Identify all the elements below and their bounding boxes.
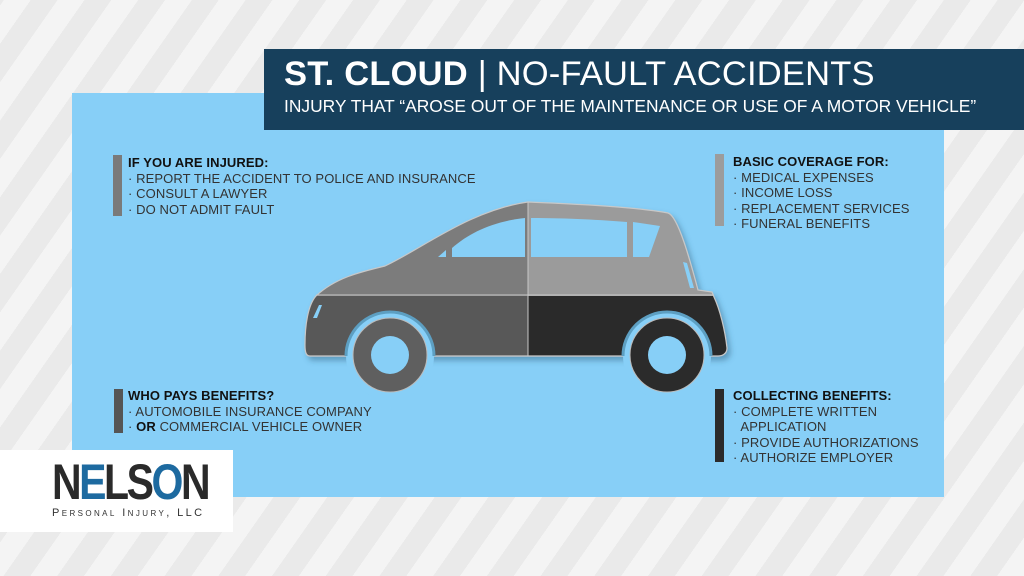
text block: if you are injured: IF YOU ARE INJURED: [128, 155, 269, 170]
logo [0, 450, 233, 532]
text block: collecting benefits: · AUTHORIZE EMPLOYER [733, 450, 893, 465]
text block: who pays [114, 388, 372, 434]
text block: basic coverage [715, 154, 910, 231]
text block: if you are injured: · REPORT THE ACCIDENT TO POLICE AND INSURANCE [128, 170, 476, 186]
logo tagline: Personal Injury, LLC [52, 507, 204, 519]
text block: collecting benefits: · PROVIDE AUTHORIZATIONS [733, 434, 919, 450]
text block: who pays: WHO PAYS BENEFITS? [128, 388, 274, 403]
wheels [346, 312, 711, 400]
text block: basic coverage: · INCOME LOSS [733, 185, 833, 200]
text block: basic coverage: · MEDICAL EXPENSES [733, 170, 874, 184]
text block: basic coverage: BASIC COVERAGE FOR: [733, 154, 889, 169]
text block: who pays: · OR COMMERCIAL VEHICLE OWNER [128, 419, 362, 434]
text block: if you are injured [113, 155, 476, 216]
text block: if you are injured: · DO NOT ADMIT FAULT [128, 202, 274, 216]
subtitle: INJURY THAT “AROSE OUT OF THE MAINTENANCE OR USE OF A MOTOR VEHICLE” [284, 96, 976, 116]
text block: basic coverage: · REPLACEMENT SERVICES [733, 200, 910, 216]
text block: if you are injured: · CONSULT A LAWYER [128, 186, 268, 201]
text block: basic coverage: · FUNERAL BENEFITS [733, 216, 870, 231]
windows [452, 218, 525, 257]
header banner [264, 49, 1024, 130]
text block: who pays: · AUTOMOBILE INSURANCE COMPANY [128, 404, 372, 418]
logo wordmark: NELSON [52, 454, 208, 510]
panel: blue background [72, 93, 944, 497]
text block: collecting benefits: APPLICATION [740, 419, 827, 434]
title: ST. CLOUD | NO-FAULT ACCIDENTS [284, 55, 875, 93]
text block: collecting benefits: · COMPLETE WRITTEN [733, 404, 877, 418]
illustration: car [304, 201, 734, 392]
text block: collecting benefits: COLLECTING BENEFITS: [733, 388, 892, 403]
text block: collecting benefits [715, 388, 919, 465]
